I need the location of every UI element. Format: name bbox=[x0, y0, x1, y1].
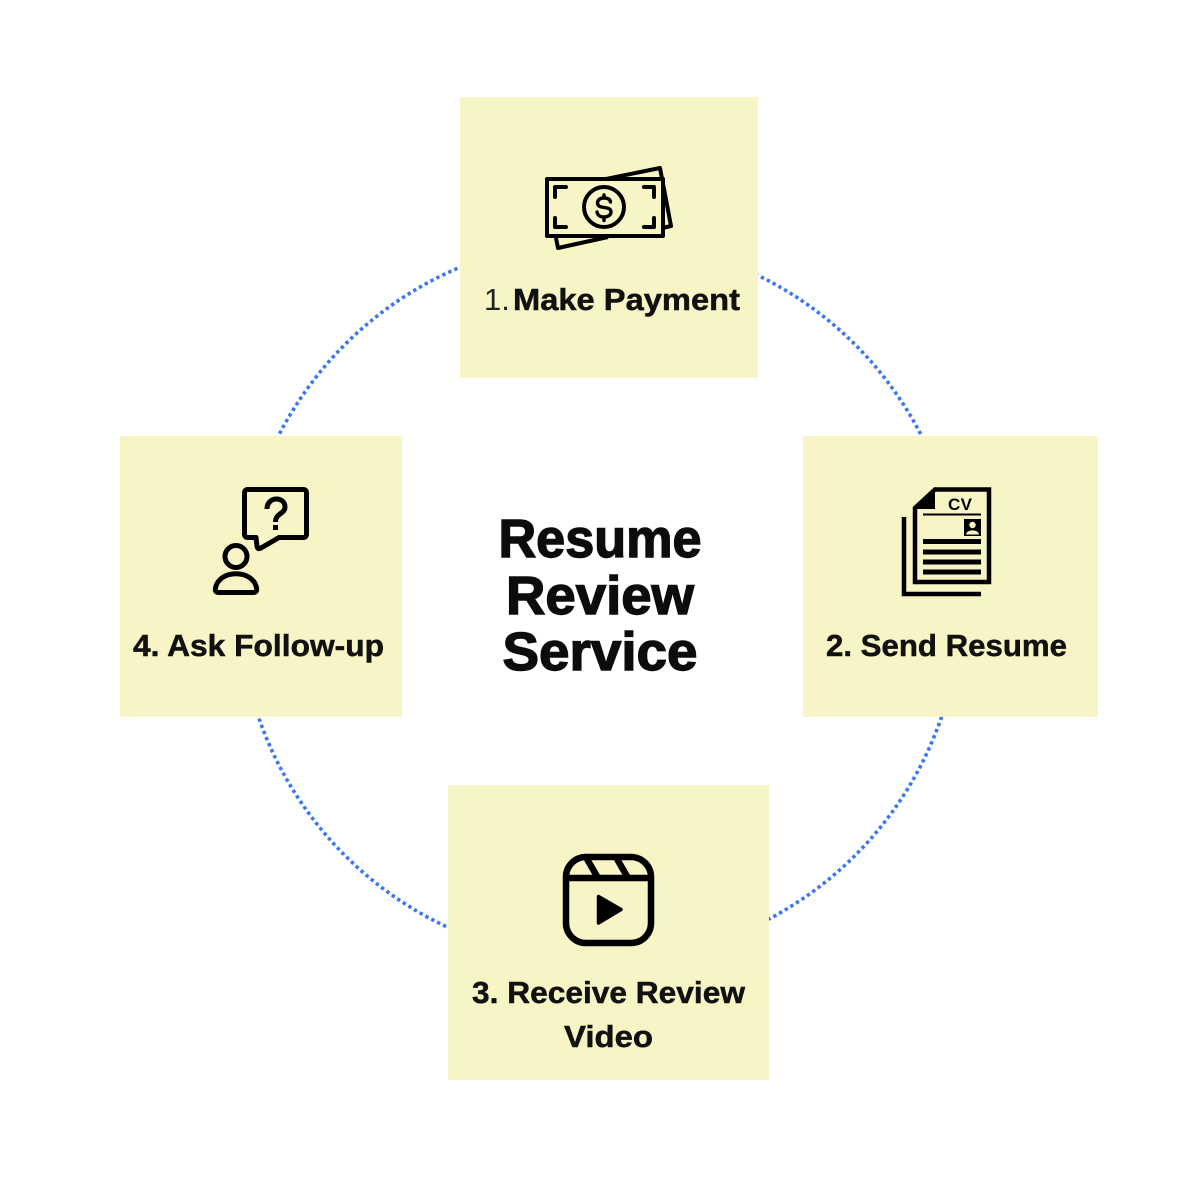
panel: step 4 ask follow-up bbox=[120, 436, 402, 717]
icon: person with question bubble bbox=[215, 490, 306, 592]
title: Service bbox=[502, 622, 698, 682]
panel: step 1 make payment bbox=[460, 97, 758, 378]
icon: cv document bbox=[904, 487, 989, 594]
icon: cv document: CV bbox=[948, 495, 973, 514]
label: make payment: Make Payment bbox=[513, 282, 740, 317]
title: Review bbox=[506, 566, 695, 626]
label: ask follow-up: 4. Ask Follow-up bbox=[133, 628, 384, 663]
panel: step 3 receive review video bbox=[448, 785, 769, 1080]
label: receive review video bbox=[472, 975, 746, 1054]
label: receive review video: 3. Receive Review bbox=[472, 975, 746, 1010]
label: send resume: 2. Send Resume bbox=[826, 628, 1067, 663]
label: receive review video: Video bbox=[564, 1019, 653, 1054]
dotted cycle ring bbox=[239, 239, 961, 961]
title: Resume bbox=[498, 509, 702, 569]
title bbox=[498, 509, 702, 682]
label: make payment: 1. bbox=[484, 282, 510, 317]
icon: video reel bbox=[566, 857, 651, 943]
panel: step 2 send resume bbox=[803, 436, 1098, 717]
icon: banknotes bbox=[547, 168, 671, 248]
